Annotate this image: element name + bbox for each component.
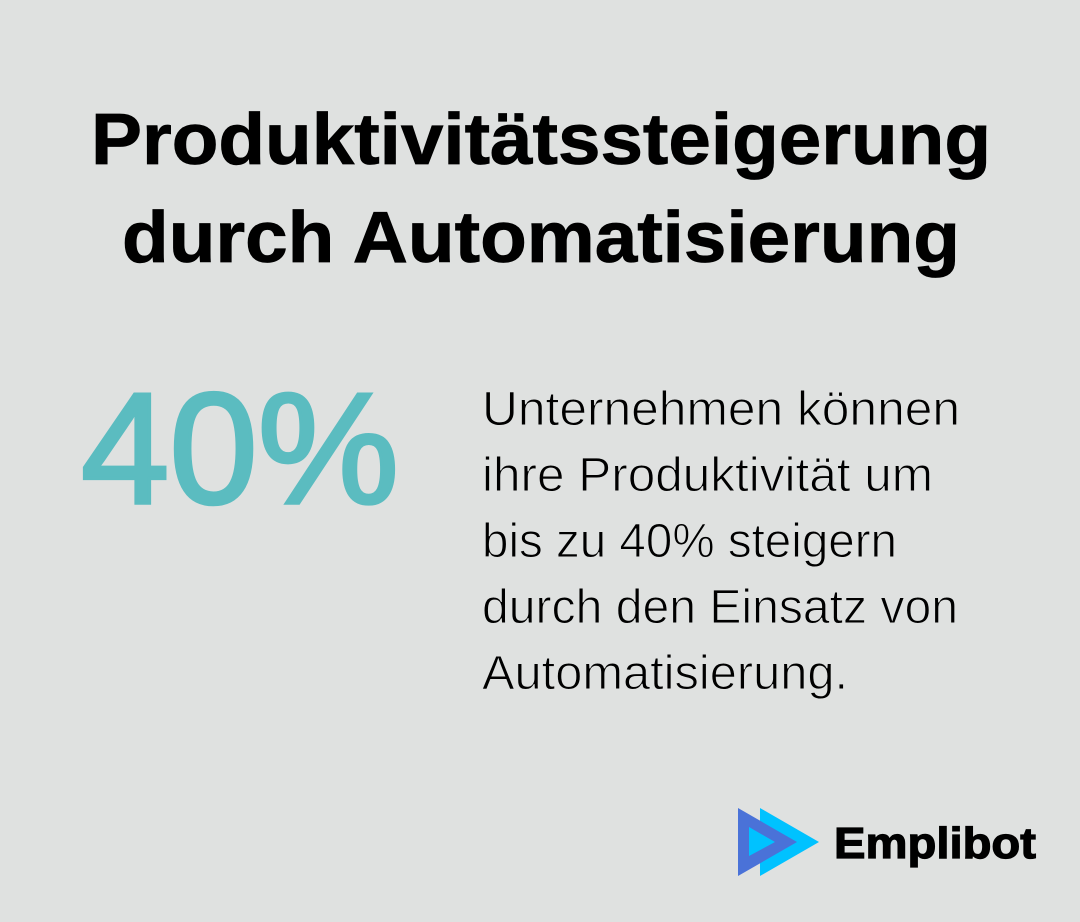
description text: Unternehmen können [482,383,960,436]
icon: play triangles [738,808,819,876]
description text: durch den Einsatz von [482,581,958,634]
logo: Emplibot [738,808,1036,876]
description text: bis zu 40% steigern [482,515,897,568]
description text [482,383,960,700]
description text: Automatisierung. [482,647,848,700]
big stat: 40%: 40% [81,361,399,537]
title: Produktivitätssteigerung [91,100,991,180]
title: durch Automatisierung [122,198,960,278]
title [91,100,991,278]
description text: ihre Produktivität um [482,449,933,502]
logo wordmark: Emplibot [834,819,1036,868]
